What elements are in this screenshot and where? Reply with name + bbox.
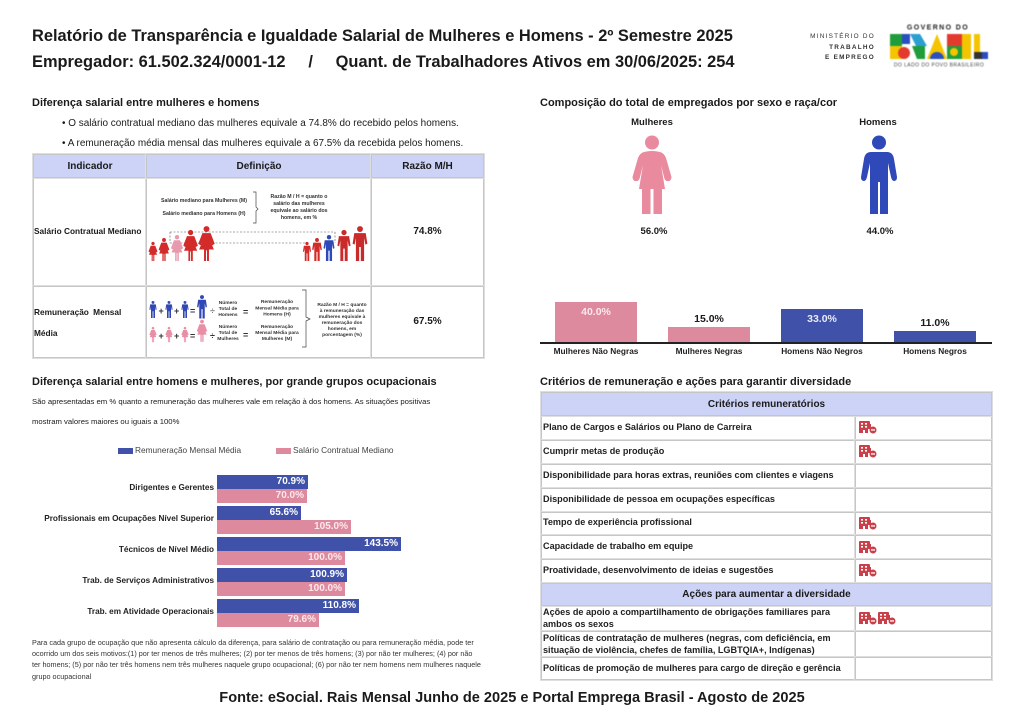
- definition graphic: remuneração média: Homens (H): [263, 312, 291, 318]
- bar chart: grupos ocupacionais: 79.6%: [288, 614, 316, 625]
- definition graphic: remuneração média: mulheres equivale à: [319, 314, 366, 320]
- footnote: [32, 638, 481, 681]
- logo: governo do brasil: DO LADO DO POVO BRASILEIRO: [894, 62, 984, 68]
- panel: tabela de critérios: ambos os sexos: [543, 618, 614, 628]
- panel: tabela de indicadores: [32, 153, 485, 359]
- definition graphic: salário mediano: equivale ao salário dos: [270, 208, 328, 214]
- logo: ministério: [810, 32, 875, 61]
- definition graphic: remuneração média: ÷: [210, 306, 215, 316]
- definition graphic: remuneração média: Mensal Média para: [255, 306, 299, 312]
- panel: tabela de critérios: Proatividade, desenvolvimento de ideias e sugestões: [543, 565, 773, 575]
- bullet texts: • O salário contratual mediano das mulheres equivale a 74.8% do recebido pelos homens.: [62, 118, 459, 129]
- bar chart: grupos ocupacionais: 70.9%: [277, 476, 305, 487]
- panel: tabela de critérios: situação de violência, chefes de família, LGBTQIA+, Indígenas): [543, 644, 815, 654]
- bar chart: grupos ocupacionais: 110.8%: [323, 600, 356, 611]
- panel: tabela de critérios: Disponibilidade de pessoa em ocupações específicas: [543, 494, 775, 504]
- logo: governo do brasil: GOVERNO DO: [907, 24, 969, 32]
- bullet texts: • A remuneração média mensal das mulheres equivale a 67.5% da recebida pelos homens.: [62, 138, 463, 149]
- logo: ministério: MINISTÉRIO DO: [810, 33, 875, 40]
- definition graphic: remuneração média: =: [243, 330, 248, 340]
- logo: ministério: E EMPREGO: [825, 54, 875, 61]
- bar chart: grupos ocupacionais: 105.0%: [314, 521, 348, 532]
- intro text: [32, 397, 430, 426]
- bar chart: grupos ocupacionais: Dirigentes e Gerentes: [129, 483, 214, 492]
- value 74.8: 74.8%: [413, 226, 442, 237]
- column chart: sexo e raça: Mulheres Não Negras: [554, 346, 638, 356]
- bar chart: grupos ocupacionais: 100.9%: [310, 569, 344, 580]
- definition graphic: remuneração média: +: [158, 331, 164, 341]
- header: ações: [541, 583, 992, 606]
- heading: grupos ocupacionais: Diferença salarial entre homens e mulheres, por grande grupos ocupacionais: [32, 376, 437, 388]
- heading: critérios: Critérios de remuneração e ações para garantir diversidade: [540, 376, 851, 388]
- definition graphic: remuneração média: =: [243, 307, 248, 317]
- definition graphic: remuneração média: Total de: [219, 306, 237, 312]
- column chart: sexo e raça: Homens Negros: [903, 346, 967, 356]
- column chart: sexo e raça: 11.0%: [920, 317, 950, 329]
- bar chart: grupos ocupacionais: Trab. de Serviços Administrativos: [82, 576, 214, 585]
- panel: tabela de critérios: Disponibilidade para horas extras, reuniões com clientes e viagens: [543, 470, 834, 480]
- definition graphic: remuneração média: =: [190, 331, 195, 341]
- footnote: ocorrido um dos seis motivos:(1) por ter menos de três mulheres; (2) por ter menos de três homens; (3) por não ter mulheres; (4) por não: [32, 649, 472, 658]
- column chart: sexo e raça: Homens Não Negros: [781, 346, 863, 356]
- label homens: Homens: [859, 117, 897, 128]
- column chart: sexo e raça: [540, 302, 992, 356]
- intro text: mostram valores maiores ou iguais a 100%: [32, 417, 179, 426]
- definition graphic: salário mediano: Salário mediano para Mulheres (M): [161, 198, 247, 204]
- panel: tabela de critérios: Políticas de promoção de mulheres para cargo de direção e gerência: [543, 663, 841, 673]
- definition graphic: salário mediano: Salário mediano para Homens (H): [162, 211, 246, 217]
- definition graphic: remuneração média: Remuneração: [261, 299, 293, 305]
- legend: [118, 445, 394, 455]
- column chart: sexo e raça: Mulheres Negras: [676, 346, 742, 356]
- footnote: ter homens; (5) por não ter três homens nem três mulheres naquele grupo ocupacional; (6) por não ter nem homens nem mulheres naquele: [32, 660, 481, 669]
- bullet texts: [62, 118, 463, 149]
- icons: critérios marcados: [859, 421, 896, 624]
- definition graphic: remuneração média: Remuneração: [261, 324, 293, 330]
- definition graphic: remuneração média: +: [174, 306, 179, 316]
- header: critérios remuneratórios: Critérios remuneratórios: [708, 399, 825, 410]
- bar chart: grupos ocupacionais: 143.5%: [364, 538, 398, 549]
- definition graphic: remuneração média: ÷: [210, 331, 215, 341]
- definition graphic: remuneração média: +: [174, 331, 179, 341]
- icon: homem: [861, 136, 897, 214]
- definition graphic: remuneração média: Homens: [218, 312, 238, 318]
- panel: tabela de critérios: Tempo de experiência profissional: [543, 517, 692, 527]
- definition graphic: remuneração média: Mulheres: [217, 336, 239, 342]
- definition graphic: remuneração média: à remuneração das: [320, 308, 365, 314]
- footnote: grupo ocupacional: [32, 672, 91, 681]
- row label: salário contratual: Salário Contratual Mediano: [34, 226, 141, 236]
- definition graphic: remuneração média: [149, 290, 367, 348]
- definition graphic: remuneração média: Mulheres (M): [262, 336, 292, 342]
- row label: remuneração: Remuneração Mensal Média: [34, 307, 121, 338]
- header: definição: Definição: [236, 161, 282, 172]
- definition graphic: remuneração média: Número: [219, 300, 237, 306]
- definition graphic: remuneração média: porcentagem (%): [322, 332, 362, 338]
- panel: tabela de critérios: Cumprir metas de produção: [543, 446, 664, 456]
- bar chart: grupos ocupacionais: 100.0%: [308, 583, 342, 594]
- icon: mulher: [632, 136, 672, 214]
- footnote: Para cada grupo de ocupação que não apresenta cálculo da diferença, para salário de contratação ou para remuneração média, pode ter: [32, 638, 474, 647]
- definition graphic: salário mediano: [148, 192, 368, 261]
- definition graphic: remuneração média: Mensal Média para: [255, 330, 299, 336]
- bar chart: grupos ocupacionais: Profissionais em Ocupações Nível Superior: [44, 514, 214, 523]
- bar chart: grupos ocupacionais: 100.0%: [308, 552, 342, 563]
- heading: diferença salarial: Diferença salarial entre mulheres e homens: [32, 97, 259, 109]
- header: razão: [371, 154, 484, 178]
- panel: tabela de critérios: Políticas de contratação de mulheres (negras, com deficiência, em: [543, 633, 831, 643]
- logo: governo do brasil: [889, 24, 989, 68]
- panel: tabela de critérios: Ações de apoio a compartilhamento de obrigações familiares para: [543, 607, 830, 617]
- definition graphic: remuneração média: =: [190, 306, 195, 316]
- column chart: sexo e raça: 33.0%: [807, 313, 837, 325]
- bar chart: grupos ocupacionais: [44, 475, 401, 627]
- logo: ministério: TRABALHO: [829, 44, 875, 50]
- column chart: sexo e raça: 15.0%: [694, 313, 724, 325]
- header: razão: Razão M/H: [402, 161, 453, 172]
- definition graphic: remuneração média: remuneração dos: [322, 320, 363, 326]
- title: Relatório de Transparência e Igualdade Salarial de Mulheres e Homens - 2º Semestre 2025: [32, 27, 733, 45]
- bar chart: grupos ocupacionais: Técnicos de Nível Médio: [119, 545, 214, 554]
- heading: composição: Composição do total de empregados por sexo e raça/cor: [540, 97, 837, 109]
- employer line: Empregador: 61.502.324/0001-12 / Quant. de Trabalhadores Ativos em 30/06/2025: 254: [32, 53, 734, 71]
- panel: tabela de critérios: Capacidade de trabalho em equipe: [543, 541, 693, 551]
- bar chart: grupos ocupacionais: 65.6%: [270, 507, 298, 518]
- header: critérios remuneratórios: [541, 392, 992, 416]
- header: indicador: [33, 154, 147, 178]
- definition graphic: remuneração média: +: [158, 306, 164, 316]
- value 67.5: 67.5%: [413, 316, 442, 327]
- column chart: sexo e raça: 40.0%: [581, 306, 611, 318]
- header: ações: Ações para aumentar a diversidade: [682, 589, 851, 600]
- definition graphic: salário mediano: Razão M / H = quanto o: [271, 194, 327, 200]
- panel: tabela de critérios: Plano de Cargos e Salários ou Plano de Carreira: [543, 422, 752, 432]
- intro text: São apresentadas em % quanto a remuneração das mulheres vale em relação à dos homens. As situações positivas: [32, 397, 430, 406]
- definition graphic: remuneração média: Razão M / H = quanto: [317, 302, 367, 308]
- definition graphic: salário mediano: salário das mulheres: [273, 201, 325, 207]
- definition graphic: salário mediano: homens, em %: [281, 215, 318, 221]
- panel: tabela de critérios: [540, 391, 993, 681]
- value 44%: 44.0%: [867, 226, 893, 237]
- definition graphic: remuneração média: Total de: [219, 330, 237, 336]
- fonte: Fonte: eSocial. Rais Mensal Junho de 2025 e Portal Emprega Brasil - Agosto de 2025: [219, 690, 805, 706]
- label mulheres: Mulheres: [631, 117, 673, 128]
- value 56%: 56.0%: [641, 226, 667, 237]
- bar chart: grupos ocupacionais: Trab. em Atividade Operacionais: [87, 607, 214, 616]
- header: definição: [146, 154, 372, 178]
- definition graphic: remuneração média: Número: [219, 324, 237, 330]
- header: indicador: Indicador: [67, 161, 112, 172]
- legend: Remuneração Mensal Média: [135, 445, 241, 455]
- bar chart: grupos ocupacionais: 70.0%: [276, 490, 304, 501]
- legend: Salário Contratual Mediano: [293, 445, 394, 455]
- definition graphic: remuneração média: homens, em: [328, 326, 357, 332]
